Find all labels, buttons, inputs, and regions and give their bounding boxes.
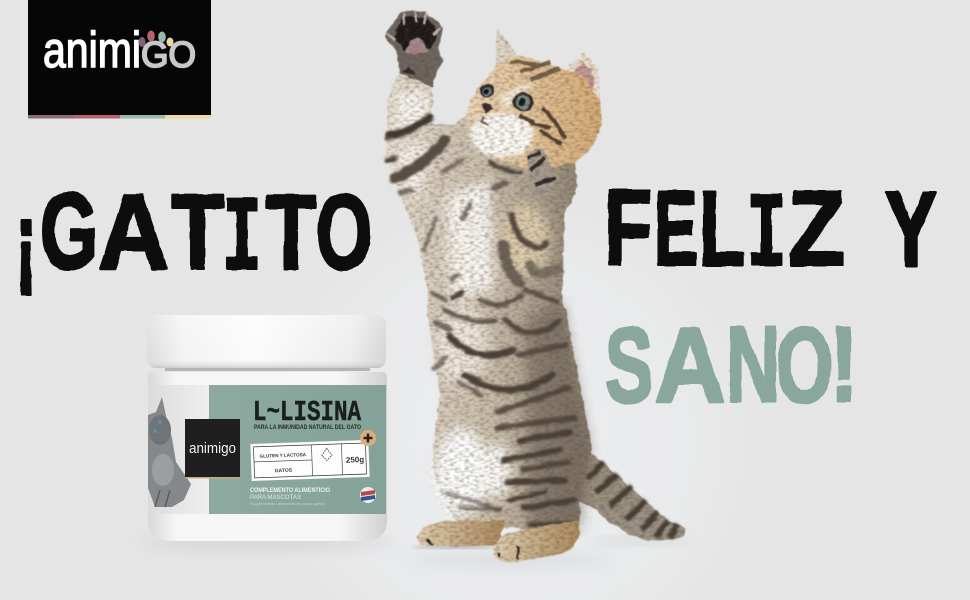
kitten dark flank shading bbox=[525, 300, 590, 530]
kitten claws bbox=[427, 540, 518, 560]
headline: ¡GATITO bbox=[15, 171, 372, 302]
headline: SANO!: A bbox=[654, 305, 726, 425]
logo wordmark: GO bbox=[141, 34, 196, 75]
headline: SANO!: S bbox=[605, 305, 653, 425]
product jar bbox=[138, 315, 398, 549]
label product type bbox=[250, 487, 330, 506]
ticket: gatos text: GATOS bbox=[275, 468, 293, 474]
icon: flag seal bbox=[360, 487, 376, 503]
headline: ¡GATITO: A bbox=[98, 172, 169, 292]
kitten white fur patches bbox=[394, 90, 549, 516]
kitten back foot bbox=[417, 520, 505, 546]
ticket: gluten text: GLUTEN Y LACTOSA bbox=[260, 452, 307, 459]
kitten raised paw bbox=[385, 10, 443, 87]
headline: FELIZ Y: L bbox=[699, 168, 745, 288]
jar shadow bbox=[138, 537, 398, 549]
headline: ¡GATITO: T bbox=[266, 172, 316, 292]
label subtitle: PARA LA INMUNIDAD NATURAL DEL GATO bbox=[254, 424, 361, 431]
kitten stripes bbox=[387, 117, 575, 525]
headline: FELIZ Y: E bbox=[654, 168, 698, 288]
headline: FELIZ Y: F bbox=[604, 167, 652, 287]
kitten nose and mouth bbox=[481, 103, 494, 125]
label logo square: animigo bbox=[189, 440, 236, 457]
kitten head bbox=[467, 55, 602, 170]
headline: ¡GATITO: T bbox=[171, 172, 224, 292]
logo wordmark: animi bbox=[43, 22, 141, 78]
ticket: icon bbox=[322, 448, 332, 461]
kitten tail bbox=[575, 445, 686, 541]
label product type: Suplemento alimenticio para gatos bbox=[250, 502, 325, 506]
headline: FELIZ Y: Y bbox=[885, 169, 937, 289]
headline: FELIZ Y: I bbox=[746, 177, 787, 298]
kitten bbox=[385, 10, 686, 562]
ticket: weight: 250g bbox=[346, 455, 364, 465]
kitten face bbox=[470, 62, 565, 157]
logo colour strip bbox=[28, 115, 211, 118]
headline: SANO!: O bbox=[776, 305, 833, 425]
label logo square bbox=[185, 419, 240, 478]
jar body bbox=[148, 372, 387, 541]
headline: ¡GATITO: I bbox=[222, 181, 262, 302]
headline: SANO!: ! bbox=[830, 304, 858, 424]
label title: L~LISINA bbox=[253, 396, 361, 429]
icon: orange badge bbox=[360, 430, 376, 446]
label: green side bbox=[209, 385, 386, 514]
kitten floor shadow bbox=[410, 537, 690, 566]
kitten right eye bbox=[512, 93, 534, 111]
headline: ¡GATITO: O bbox=[316, 172, 372, 292]
kitten small paw bbox=[527, 149, 557, 203]
label cat photo bbox=[148, 397, 191, 507]
brand logo panel bbox=[28, 0, 211, 118]
kitten front foot bbox=[493, 520, 580, 562]
label: photo side bbox=[148, 385, 210, 514]
headline: SANO!: N bbox=[726, 304, 780, 424]
headline: ¡GATITO: G bbox=[40, 171, 98, 291]
kitten body and arm bbox=[385, 72, 592, 535]
headline: FELIZ Y bbox=[604, 167, 937, 298]
headline: FELIZ Y: Z bbox=[788, 168, 845, 288]
kitten ears bbox=[495, 28, 602, 125]
kitten left eye bbox=[480, 84, 494, 98]
label product type: COMPLEMENTO ALIMENTICIO bbox=[250, 487, 330, 494]
label info ticket bbox=[250, 440, 370, 481]
icon: logo paw dots bbox=[138, 30, 174, 47]
label product type: PARA MASCOTAS bbox=[250, 495, 301, 501]
jar lid bbox=[147, 315, 386, 371]
headline: SANO! bbox=[605, 304, 858, 425]
headline: ¡GATITO: ¡ bbox=[15, 180, 37, 300]
